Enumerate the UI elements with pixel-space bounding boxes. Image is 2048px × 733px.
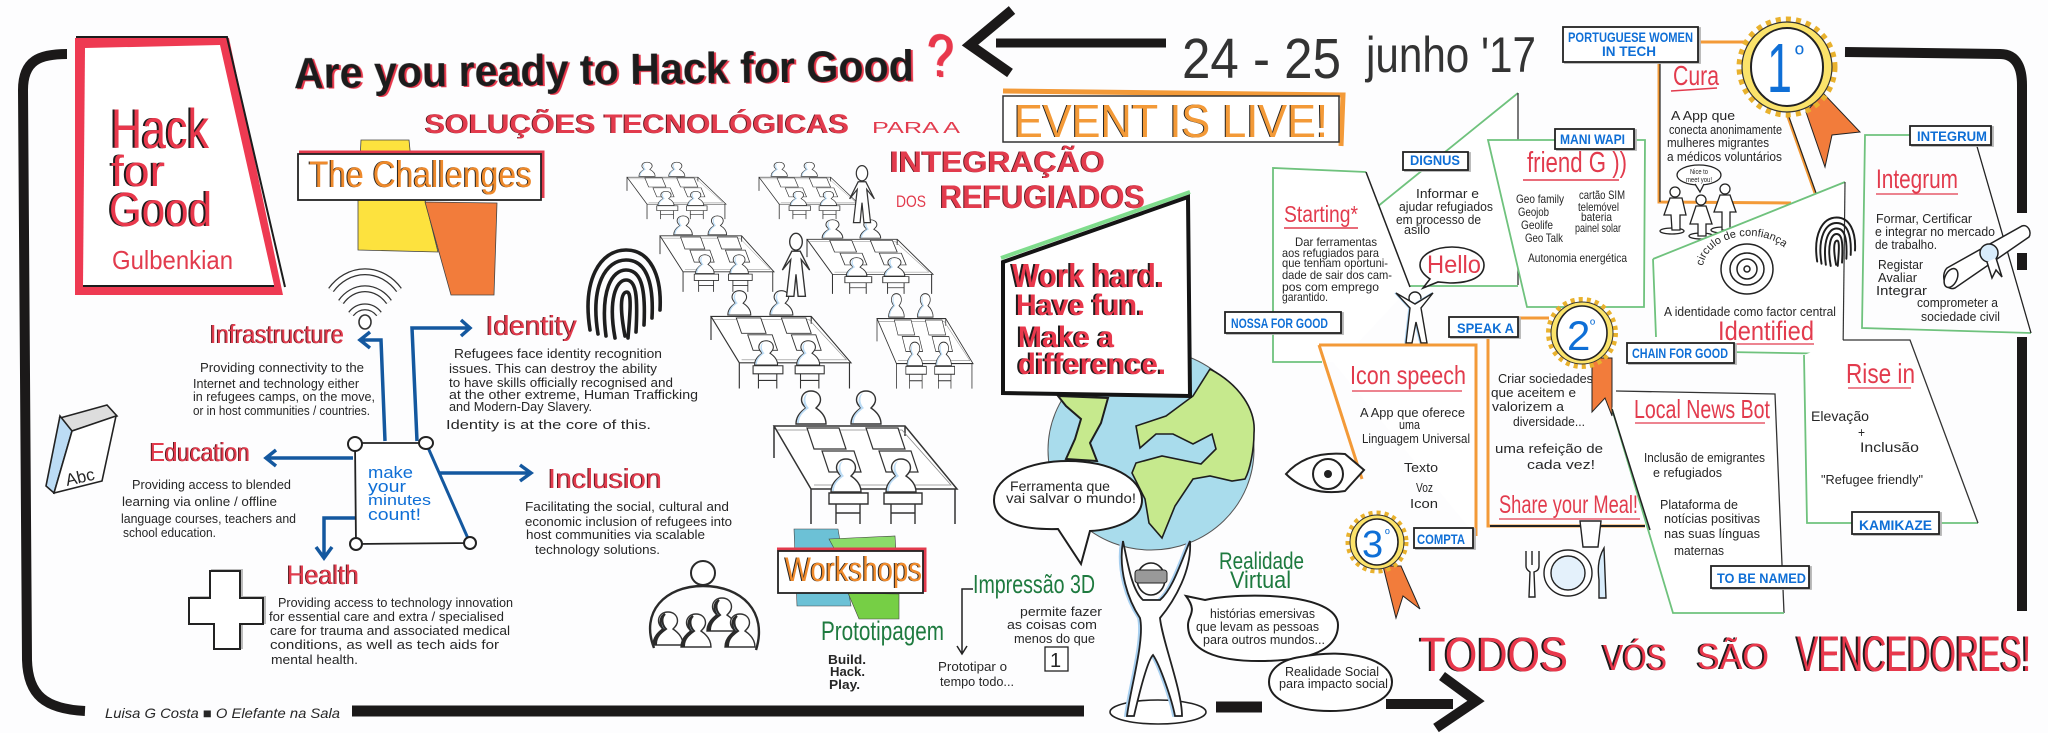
subtitle: SOLUÇÕES TECNOLÓGICAS	[425, 108, 849, 139]
panel: Dignus	[1377, 93, 1518, 286]
date: junho '17	[1364, 27, 1536, 83]
panel: Local News Bot: e refugiados	[1653, 465, 1722, 480]
icon: medical cross	[189, 571, 263, 649]
text: Impressao 3D: Impressão 3D	[973, 569, 1095, 599]
panel: Starting: que tenham oportuni-	[1282, 256, 1388, 270]
closing message: VÓS	[1603, 637, 1667, 678]
illustration: three women talking: meet you!	[1686, 177, 1712, 184]
medal: second place	[1549, 300, 1615, 416]
panel: Share your Meal: Criar sociedades	[1498, 371, 1593, 386]
heading and text: Infrastructure: Infrastructure	[210, 319, 344, 349]
text: Impressao 3D: menos do que	[1014, 631, 1095, 646]
heading and text: Infrastructure	[193, 319, 375, 418]
logo box: Hack for Good: Hack	[111, 97, 210, 160]
panel: Cura: a médicos voluntários	[1667, 149, 1782, 164]
heading and text: Education	[121, 437, 296, 540]
subtitle: INTEGRAÇÃO	[890, 145, 1105, 179]
speech bubble: Ferramenta: Ferramenta que	[1010, 478, 1110, 494]
panel: Starting: dade de sair dos cam-	[1282, 268, 1392, 282]
heading and text: Health: for essential care and extra / specialised	[269, 609, 504, 624]
heading and text: Health: Providing access to technology innovation	[278, 595, 513, 610]
speech bubble: realidade social	[1269, 654, 1392, 711]
panel: Local News Bot: nas suas línguas	[1664, 526, 1760, 541]
heading and text: Education: language courses, teachers and	[121, 511, 296, 526]
closing message	[1420, 626, 2031, 682]
heading and text: Identity: Identity	[486, 310, 577, 341]
logo box: Hack for Good	[75, 37, 285, 295]
panel: Local News Bot: notícias positivas	[1664, 511, 1760, 526]
heading and text: Identity: and Modern-Day Slavery.	[449, 399, 592, 414]
panel: Starting: Starting*	[1284, 201, 1358, 227]
subtitle: REFUGIADOS	[940, 179, 1145, 215]
panel: friend G	[1488, 140, 1645, 307]
panel: Rise in: "Refugee friendly"	[1821, 472, 1923, 487]
heading and text: Identity: to have skills officially recognised and	[449, 375, 673, 390]
heading and text: Inclusion: economic inclusion of refugees into	[525, 514, 732, 529]
heading and text: Health: conditions, as well as tech aids for	[270, 637, 500, 652]
panel: Icon speech: Texto	[1404, 460, 1438, 475]
tag: Portuguese Women in Tech	[1563, 27, 1698, 62]
panel: Integrum: Avaliar	[1878, 270, 1918, 285]
medal: first place	[1740, 20, 1860, 167]
icon: small fingerprint	[1816, 218, 1855, 266]
tag: Chain for good	[1627, 343, 1734, 363]
text: Prototipagem: Hack.	[830, 664, 865, 679]
medal: first place: º	[1795, 41, 1804, 68]
diagram: make your minutes count with arrows: make	[368, 463, 413, 482]
panel: friend G: Autonomia energética	[1528, 251, 1627, 265]
icon: place setting	[1526, 521, 1606, 598]
logo box: Hack for Good: Good	[109, 184, 212, 237]
title: Are you ready to Hack for Good	[294, 41, 914, 98]
speech bubble: historias	[1186, 596, 1338, 661]
frame: border left and bottom	[23, 54, 85, 711]
panel: Starting: Dar ferramentas	[1295, 235, 1377, 249]
workshops colour blocks	[794, 529, 899, 619]
tag: Kamikaze: KAMIKAZE	[1859, 517, 1932, 533]
heading and text: Health	[269, 560, 513, 667]
speech bubble: realidade social: Realidade Social	[1285, 664, 1379, 679]
panel: Share your Meal: valorizem a	[1492, 399, 1565, 414]
medal: third place: º	[1385, 526, 1390, 541]
panel: Cura	[1659, 42, 1816, 203]
heading and text: Education: school education.	[123, 525, 216, 540]
heading and text: Health: Health	[287, 560, 359, 590]
illustration: family group	[650, 561, 759, 650]
tag: Integrum: INTEGRUM	[1917, 128, 1987, 144]
globe	[1048, 350, 1254, 550]
panel: friend G: Geojob	[1518, 205, 1549, 219]
panel: work hard	[1001, 192, 1190, 396]
panel: Starting: pos com emprego	[1282, 280, 1379, 294]
panel: friend G: telemóvel	[1578, 200, 1619, 214]
text: Impressao 3D: Prototipar o	[938, 659, 1007, 674]
panel: Integrum: Registar	[1878, 257, 1924, 272]
heading and text: Inclusion: Inclusion	[548, 463, 662, 494]
icon: book: Abc	[64, 465, 97, 490]
panel: Cura: A App que	[1671, 108, 1735, 123]
panel: friend G: Geolife	[1521, 218, 1553, 232]
panel: Dignus: em processo de	[1396, 212, 1481, 227]
panel: Starting: aos refugiados para	[1282, 246, 1379, 260]
text: Realidade Virtual	[1219, 548, 1304, 594]
closing message: TODOS	[1420, 629, 1568, 682]
panel: Rise in: Elevação	[1811, 408, 1869, 424]
panel: Cura: conecta anonimamente	[1669, 122, 1782, 137]
heading and text: Education: learning via online / offline	[122, 494, 277, 509]
date	[1182, 27, 1536, 91]
heading and text: Infrastructure: in refugees camps, on the move,	[193, 389, 375, 404]
subtitle: DOS	[896, 192, 926, 211]
logo box: Hack for Good: for	[111, 147, 165, 196]
logo box: Hack for Good: Gulbenkian	[112, 245, 233, 275]
panel: friend G: Geo family	[1516, 192, 1564, 206]
challenges colour blocks	[358, 140, 497, 295]
medal: second place: º	[1590, 316, 1595, 332]
panel: Icon speech: Linguagem Universal	[1362, 431, 1470, 446]
tag: To be named	[1711, 566, 1809, 588]
heading and text: Inclusion	[525, 463, 732, 557]
icon: eye	[1286, 454, 1364, 492]
panel: work hard: Work hard.	[1012, 257, 1164, 294]
panel: Icon speech: Icon speech	[1350, 360, 1466, 390]
medal: first place: 1	[1767, 29, 1792, 107]
arrow: top pointing to title	[970, 10, 1166, 73]
heading and text: Inclusion: host communities via scalable	[526, 527, 705, 542]
text: Impressao 3D: as coisas com	[1007, 617, 1097, 632]
tag: Chain for good: CHAIN FOR GOOD	[1632, 345, 1728, 361]
tag: Mani Wapi: MANI WAPI	[1560, 131, 1625, 147]
panel: Share your Meal: que aceitem e	[1491, 385, 1576, 400]
panel: Identified: A identidade como factor central	[1664, 304, 1836, 319]
heading and text: Inclusion: Facilitating the social, cultural and	[525, 499, 729, 514]
panel: Share your Meal: Share your Meal!	[1499, 491, 1638, 519]
arrow: bottom right	[1386, 676, 1476, 728]
panel: Integrum: Formar, Certificar	[1876, 211, 1973, 226]
diagram: make your minutes count with arrows	[266, 320, 531, 558]
credit: Luisa G Costa ■ O Elefante na Sala	[105, 705, 340, 721]
panel: Icon speech	[1319, 345, 1476, 536]
frame: right border	[1845, 52, 2022, 611]
panel: Cura: Cura	[1673, 60, 1719, 91]
speech bubble: Ferramenta: vai salvar o mundo!	[1006, 490, 1136, 506]
panel: Integrum: e integrar no mercado	[1875, 224, 1995, 239]
heading and text: Identity: Identity is at the core of this.	[446, 417, 651, 432]
text: Realidade Virtual: Realidade	[1219, 548, 1304, 575]
date: 24 - 25	[1182, 27, 1341, 91]
panel: Share your Meal: uma refeição de	[1495, 441, 1603, 456]
heading: The Challenges: The Challenges	[309, 154, 532, 195]
panel: Integrum: Integrum	[1876, 164, 1958, 194]
panel: friend G: painel solar	[1575, 221, 1621, 235]
tag: Kamikaze	[1852, 512, 1939, 534]
tag: Dignus: DIGNUS	[1410, 152, 1460, 168]
tag: To be named: TO BE NAMED	[1717, 570, 1806, 586]
panel: friend G: bateria	[1581, 210, 1612, 224]
panel: Identified: circulo de confiança	[1697, 228, 1786, 265]
heading and text: Health: care for trauma and associated medical	[270, 623, 510, 638]
heading: Workshops: Workshops	[785, 551, 922, 589]
icon: book	[46, 405, 117, 493]
heading and text: Infrastructure: Internet and technology either	[193, 376, 360, 391]
heading and text: Identity	[446, 310, 698, 432]
medal: second place: 2	[1567, 312, 1590, 359]
panel: friend G: Geo Talk	[1525, 231, 1564, 245]
figure: person with VR holding globe	[1110, 541, 1206, 724]
heading and text: Infrastructure: or in host communities / countries.	[193, 403, 370, 418]
diagram: make your minutes count with arrows: minutes	[368, 492, 431, 509]
panel: Starting: garantido.	[1282, 290, 1328, 304]
panel: Dignus: ajudar refugiados	[1399, 199, 1493, 214]
panel: Dignus: Informar e	[1416, 186, 1479, 201]
title: ?	[926, 22, 953, 89]
text: Prototipagem: Play.	[829, 677, 860, 692]
panel: Icon speech: Icon	[1410, 496, 1438, 511]
medal: third place	[1348, 513, 1420, 618]
panel: Identified: Identified	[1718, 316, 1814, 346]
frame: bottom bar	[352, 706, 1084, 716]
panel: Share your Meal: cada vez!	[1527, 457, 1595, 472]
tag: Nossa for good	[1225, 312, 1341, 333]
panel: Icon speech: Voz	[1416, 480, 1433, 495]
speech bubble: historias: histórias emersivas	[1210, 606, 1315, 621]
panel: Integrum: de trabalho.	[1875, 237, 1937, 252]
tag: Speak A: SPEAK A	[1457, 320, 1514, 336]
panel: Dignus: asilo	[1404, 222, 1430, 237]
speech bubble: historias: para outros mundos...	[1203, 632, 1325, 647]
tag: Nossa for good: NOSSA FOR GOOD	[1231, 315, 1328, 331]
banner: event is live: EVENT IS LIVE!	[1014, 95, 1328, 147]
closing message: SÃO	[1697, 636, 1769, 677]
panel: Local News Bot: maternas	[1674, 543, 1724, 558]
heading and text: Identity: Refugees face identity recognition	[454, 346, 662, 361]
heading and text: Identity: issues. This can destroy the ability	[449, 361, 658, 376]
panel: Starting	[1273, 168, 1410, 362]
illustration: three women talking: Nice to	[1690, 169, 1708, 176]
text: Impressao 3D: tempo todo...	[940, 674, 1014, 689]
diagram: make your minutes count with arrows: count!	[368, 505, 421, 524]
panel: Share your Meal: diversidade...	[1513, 414, 1585, 429]
panel: work hard: difference.	[1018, 348, 1166, 381]
illustration: people at tables	[627, 162, 973, 524]
heading and text: Identity: at the other extreme, Human Trafficking	[449, 387, 698, 402]
panel: work hard: Have fun.	[1016, 289, 1145, 322]
panel: work hard: Make a	[1018, 321, 1114, 354]
panel: Local News Bot: Inclusão de emigrantes	[1644, 450, 1765, 465]
text: Impressao 3D	[938, 569, 1103, 689]
subtitle	[425, 108, 1145, 215]
panel: Identified	[1652, 181, 1846, 354]
icon: diploma	[1941, 226, 2030, 290]
heading: Workshops	[777, 549, 925, 593]
bubble: Hello	[1420, 247, 1484, 288]
illustration: three women talking	[1660, 165, 1736, 239]
panel: Rise in: Inclusão	[1860, 439, 1919, 455]
text: Realidade Virtual: Virtual	[1230, 567, 1291, 594]
medal: third place: 3	[1362, 524, 1383, 566]
text: Prototipagem: Build.	[828, 652, 866, 667]
speech bubble: Ferramenta	[994, 461, 1142, 564]
heading and text: Education: Providing access to blended	[132, 477, 291, 492]
bubble: Hello: Hello	[1427, 251, 1481, 279]
panel: Local News Bot	[1612, 391, 1784, 613]
panel: Icon speech: A App que oferece	[1360, 405, 1465, 420]
panel: Integrum: sociedade civil	[1921, 309, 2000, 324]
icon: wifi	[331, 272, 399, 329]
panel: Rise in: +	[1858, 424, 1865, 440]
heading and text: Education: Education	[150, 437, 250, 467]
panel: friend G: cartão SIM	[1579, 188, 1625, 202]
speech bubble: historias: que levam as pessoas	[1196, 619, 1319, 634]
panel: Integrum: comprometer a	[1917, 295, 1999, 310]
panel: Share your Meal	[1488, 318, 1645, 526]
panel: Local News Bot: Plataforma de	[1660, 497, 1738, 512]
heading and text: Health: mental health.	[271, 652, 358, 667]
text: Impressao 3D: 1	[1050, 650, 1061, 672]
frame: bottom stub	[1216, 702, 1262, 712]
text: Prototipagem: Prototipagem	[821, 616, 944, 646]
panel: Integrum: Integrar	[1876, 283, 1928, 298]
panel: Rise in	[1804, 340, 1978, 523]
subtitle: PARA A	[872, 120, 961, 137]
heading and text: Infrastructure: Providing connectivity to the	[200, 360, 364, 375]
heading and text: Inclusion: technology solutions.	[535, 542, 660, 557]
text: Impressao 3D: permite fazer	[1020, 604, 1103, 619]
panel: friend G: friend G ))	[1527, 147, 1627, 179]
tag: Compta: COMPTA	[1417, 531, 1465, 547]
icon: fingerprint	[588, 250, 660, 338]
speech bubble: realidade social: para impacto social	[1279, 676, 1388, 691]
tag: Portuguese Women in Tech: IN TECH	[1602, 43, 1656, 59]
panel: Local News Bot: Local News Bot	[1634, 394, 1771, 424]
panel: Integrum	[1862, 135, 2031, 333]
panel: Cura: mulheres migrantes	[1667, 135, 1769, 150]
figure: person waving	[1396, 292, 1433, 343]
diagram: make your minutes count with arrows: your	[368, 477, 406, 496]
text: Prototipagem	[821, 616, 944, 692]
panel: Icon speech: uma	[1399, 417, 1421, 432]
panel: Rise in: Rise in	[1846, 358, 1915, 389]
tag: Portuguese Women in Tech: PORTUGUESE WOMEN	[1568, 29, 1693, 45]
